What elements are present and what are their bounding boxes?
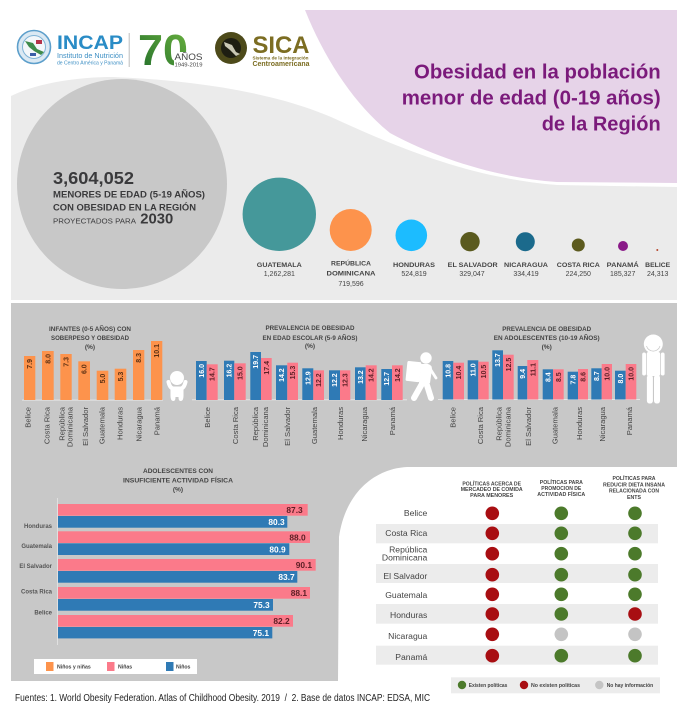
- heading: infants: (%): [85, 344, 95, 351]
- heading: infants: SOBERPESO Y OBESIDAD: [51, 335, 129, 342]
- legend: policy status: No existen políticas: [531, 683, 580, 689]
- heading: infants: [49, 324, 131, 351]
- bar values: 11.0: [470, 363, 478, 377]
- column headers: POLÍTICAS ACERCA DE: [462, 480, 521, 488]
- logo: INCAP: de Centro América y Panamá: [57, 60, 123, 66]
- policy dots: food marketing: [486, 506, 499, 662]
- bar values: 13.2: [358, 370, 365, 384]
- bar values: 75.1: [253, 628, 269, 638]
- bar values: 14.7: [210, 367, 217, 381]
- country labels: Panamá: [625, 406, 634, 435]
- bar values: [253, 505, 312, 638]
- title: menor de edad (0-19 años): [402, 86, 661, 109]
- country names: Dominicana: [382, 553, 428, 563]
- column headers: MERCADEO DE COMIDA: [461, 487, 523, 493]
- bar values: 7.9: [27, 359, 34, 369]
- bar values: [27, 344, 161, 383]
- bubble: Costa Rica: [557, 238, 600, 278]
- column headers: REDUCIR DIETA INSANA: [603, 482, 665, 488]
- bar values: 10.1: [154, 344, 161, 358]
- country labels: El Salvador: [524, 407, 533, 446]
- country labels: Belice: [23, 407, 32, 428]
- panel: purple title background: [305, 10, 677, 183]
- country labels: Panamá: [388, 406, 397, 435]
- chart: school-age obesity: [192, 325, 407, 447]
- country names: Panamá: [395, 652, 428, 662]
- big circle: regional total: MENORES DE EDAD (5-19 AÑOS): [53, 189, 205, 200]
- chart: insufficient physical activity: [19, 468, 316, 674]
- heading: adolescents: [494, 326, 600, 351]
- bar values: 8.6: [580, 372, 588, 382]
- country labels: Panamá: [153, 406, 162, 435]
- country labels: Guatemala: [21, 544, 53, 550]
- bar values: 15.0: [238, 366, 244, 380]
- country labels: República: [58, 406, 66, 441]
- bar values: 6.0: [82, 364, 89, 374]
- column headers: PARA MENORES: [470, 493, 514, 499]
- bar values: 82.2: [273, 616, 290, 626]
- heading: adolescents: (%): [542, 344, 552, 351]
- title: Obesidad en la población: [414, 60, 661, 83]
- bar values: 8.0: [45, 354, 52, 364]
- bar values: 12.7: [384, 372, 391, 386]
- blue bars: boys: [58, 516, 297, 638]
- logo: 70 años: 70: [138, 26, 188, 75]
- heading: school age: EN EDAD ESCOLAR (5-9 AÑOS): [262, 333, 358, 342]
- legend: policy status: [451, 677, 660, 693]
- bar values: 90.1: [296, 560, 312, 570]
- logo: SICA: SICA: [252, 32, 310, 59]
- bar values: 10.8: [446, 364, 452, 378]
- bubble: Guatemala: 1,262,281: [264, 271, 295, 278]
- bubble: El Salvador: [448, 232, 498, 278]
- logo: INCAP: [18, 30, 130, 67]
- bar values: 11.1: [530, 363, 537, 376]
- country labels: [19, 524, 53, 617]
- bar values: 80.3: [268, 517, 285, 527]
- bubble: Honduras: [393, 220, 435, 278]
- logos: [18, 26, 310, 75]
- blue bars: boys: [196, 352, 392, 400]
- bar values: 12.2: [316, 373, 323, 387]
- column headers: ENTS: [627, 495, 641, 501]
- bar values: 15.3: [290, 366, 297, 379]
- blue bars: boys: [443, 350, 626, 400]
- heading: school age: PREVALENCIA DE OBESIDAD: [266, 325, 355, 332]
- country labels: Dominicana: [503, 406, 512, 447]
- bubble: Belice: 24,313: [647, 271, 669, 278]
- legend: bar colours: [34, 659, 197, 674]
- bubble: Honduras: HONDURAS: [393, 262, 435, 269]
- bar values: 13.7: [495, 353, 502, 367]
- legend: bar colours: Niños y niñas: [57, 664, 91, 670]
- country labels: República: [251, 406, 260, 441]
- bar values: 12.2: [332, 373, 339, 387]
- chart: adolescent obesity: [438, 326, 640, 447]
- row stripes: [376, 524, 658, 665]
- panel: light grey top background: [11, 77, 677, 300]
- column headers: POLÍTICAS PARA: [612, 474, 656, 482]
- chart: infants overweight and obesity: [22, 324, 163, 447]
- heading: adolescents: EN ADOLESCENTES (10-19 AÑOS): [494, 333, 600, 342]
- country labels: Guatemala: [98, 406, 107, 444]
- icon: baby: [168, 371, 186, 401]
- bubble: República Dominicana: DOMINICANA: [326, 270, 376, 278]
- big circle: regional total: 3,604,052: [53, 168, 134, 188]
- bar values: 75.3: [253, 600, 270, 610]
- big circle: regional total: PROYECTADOS PARA: [53, 216, 137, 225]
- title: [402, 60, 661, 136]
- bar values: 19.7: [253, 355, 260, 369]
- column headers: [461, 474, 665, 501]
- bar values: 88.1: [291, 588, 307, 598]
- country labels: Guatemala: [551, 406, 560, 444]
- country labels: El Salvador: [19, 564, 53, 570]
- legend: bar colours: Niñas: [118, 664, 132, 670]
- country labels: Belice: [449, 407, 458, 428]
- country labels: Costa Rica: [43, 406, 52, 444]
- country labels: Honduras: [575, 407, 584, 440]
- bar values: 8.0: [618, 374, 625, 383]
- heading: school age: [262, 325, 358, 350]
- icon: child with backpack: [405, 352, 436, 398]
- heading: physical activity: INSUFICIENTE ACTIVIDAD FÍSICA: [123, 475, 233, 484]
- country labels: Belice: [203, 407, 212, 428]
- bubble: Nicaragua: 334,419: [513, 271, 539, 278]
- country labels: [203, 406, 397, 447]
- panel: grey charts background: [11, 303, 677, 681]
- country labels: Honduras: [336, 407, 345, 440]
- country labels: Nicaragua: [134, 406, 143, 442]
- logo: SICA: [215, 32, 310, 68]
- country labels: Guatemala: [310, 406, 319, 444]
- country labels: Costa Rica: [476, 406, 485, 444]
- bar values: 12.3: [343, 373, 350, 387]
- bar values: 16.0: [199, 364, 206, 378]
- bar values: 10.0: [628, 367, 636, 381]
- heading: infants: INFANTES (0-5 AÑOS) CON: [49, 324, 131, 333]
- country labels: [449, 406, 634, 447]
- country labels: Nicaragua: [360, 406, 369, 442]
- country labels: Honduras: [115, 407, 124, 440]
- bar values: 8.5: [556, 372, 563, 382]
- logo: SICA: Sistema de la Integración: [252, 56, 309, 62]
- logo: INCAP: INCAP: [57, 32, 123, 54]
- bubble: Nicaragua: NICARAGUA: [504, 262, 548, 269]
- orange bars: [24, 341, 162, 400]
- bubble: Panamá: [607, 241, 639, 278]
- bar values: [199, 355, 402, 387]
- big circle: regional total: CON OBESIDAD EN LA REGIÓN: [53, 201, 196, 213]
- icon: adolescent: [642, 334, 665, 404]
- bar values: 10.4: [456, 366, 463, 379]
- bar values: 8.7: [594, 371, 601, 381]
- bar values: 14.2: [369, 368, 376, 382]
- bar values: 9.4: [520, 369, 527, 379]
- bubble: Panamá: 185,327: [610, 271, 635, 278]
- country labels: El Salvador: [81, 407, 90, 446]
- bar values: 8.3: [136, 353, 143, 363]
- bubble: Honduras: 524,819: [401, 271, 427, 278]
- country names: [382, 508, 428, 662]
- heading: physical activity: [123, 468, 233, 494]
- bar values: 7.3: [64, 357, 70, 367]
- bubble: Costa Rica: 224,250: [566, 271, 591, 278]
- country names: Nicaragua: [388, 631, 428, 641]
- bubble: Guatemala: [243, 178, 316, 278]
- country labels: Honduras: [24, 524, 53, 530]
- bar values: 8.4: [545, 372, 552, 382]
- bubble: Panamá: PANAMÁ: [607, 260, 639, 269]
- heading: physical activity: (%): [173, 486, 183, 494]
- bar values: 10.5: [481, 365, 488, 378]
- country names: El Salvador: [383, 571, 427, 581]
- country names: Costa Rica: [385, 528, 428, 538]
- bubble: Guatemala: GUATEMALA: [257, 262, 302, 269]
- bar values: [446, 353, 636, 384]
- bar values: 83.7: [278, 572, 295, 582]
- bar values: 14.2: [279, 368, 286, 382]
- country names: Belice: [404, 508, 428, 518]
- bar values: 88.0: [289, 532, 306, 542]
- bar values: 16.2: [227, 364, 234, 377]
- title: de la Región: [542, 113, 661, 136]
- bar values: 5.0: [100, 374, 107, 383]
- policy dots: unhealthy diet: [628, 506, 642, 662]
- bubble: Costa Rica: COSTA RICA: [557, 262, 600, 269]
- bar values: 80.9: [269, 544, 286, 554]
- country labels: Dominicana: [65, 406, 74, 447]
- bar values: 7.8: [570, 375, 577, 384]
- legend: policy status: Existen políticas: [469, 683, 507, 689]
- table: public policies by country: [376, 474, 665, 693]
- country labels: Nicaragua: [598, 406, 607, 442]
- bar values: 10.0: [604, 367, 611, 381]
- bar values: 17.4: [264, 361, 271, 375]
- pink bars: girls: [453, 355, 636, 400]
- bubble: República Dominicana: REPÚBLICA: [331, 258, 371, 268]
- logo: 70 años: 1949-2019: [174, 62, 202, 68]
- column headers: ACTIVIDAD FÍSICA: [537, 490, 585, 498]
- bubble: República Dominicana: [326, 209, 376, 288]
- bubble: Belice: BELICE: [645, 262, 671, 269]
- country names: República: [389, 544, 428, 554]
- pink bars: girls: [207, 358, 403, 400]
- country names: Honduras: [390, 610, 427, 620]
- country labels: Costa Rica: [21, 590, 53, 596]
- country labels: [23, 406, 162, 447]
- bar values: 12.5: [506, 358, 513, 371]
- logo: INCAP: Instituto de Nutrición: [57, 51, 123, 60]
- column headers: PROMOCION DE: [541, 486, 582, 492]
- country labels: El Salvador: [283, 407, 292, 446]
- bar values: 12.9: [305, 371, 312, 385]
- bar values: 87.3: [286, 505, 303, 515]
- column headers: POLÍTICAS PARA: [540, 478, 583, 486]
- big circle: regional total: [17, 79, 227, 289]
- legend: policy status: No hay información: [607, 683, 653, 689]
- legend: bar colours: Niños: [176, 664, 191, 670]
- column headers: RELACIONADA CON: [609, 489, 659, 495]
- country names: Guatemala: [385, 590, 428, 600]
- heading: school age: (%): [305, 343, 315, 350]
- country labels: Belice: [34, 611, 53, 617]
- heading: adolescents: PREVALENCIA DE OBESIDAD: [502, 326, 591, 333]
- logo: 70 años: AÑOS: [174, 52, 202, 62]
- bubble: República Dominicana: 719,596: [338, 281, 364, 288]
- heading: physical activity: ADOLESCENTES CON: [143, 468, 213, 475]
- logo: SICA: Centroamericana: [252, 61, 310, 68]
- policy dots: physical activity: [554, 506, 568, 662]
- country labels: República: [494, 406, 503, 441]
- bubble chart: obesity by country: [243, 178, 671, 288]
- bubble: Nicaragua: [504, 232, 548, 278]
- bar values: 5.3: [118, 372, 125, 381]
- country labels: Dominicana: [261, 406, 270, 447]
- bar values: 14.2: [395, 368, 402, 382]
- big circle: regional total: 2030: [140, 210, 173, 227]
- bubble: El Salvador: EL SALVADOR: [448, 262, 498, 269]
- bubble: El Salvador: 329,047: [459, 271, 485, 278]
- bubble: Belice: [645, 249, 671, 278]
- country labels: Costa Rica: [231, 406, 240, 444]
- pink bars: girls: [58, 504, 316, 627]
- footer: sources: Fuentes: 1. World Obesity Federation. Atlas of Childhood Obesity. 2019 / 2. Base de datos INCAP: EDSA, MIC: [15, 693, 430, 704]
